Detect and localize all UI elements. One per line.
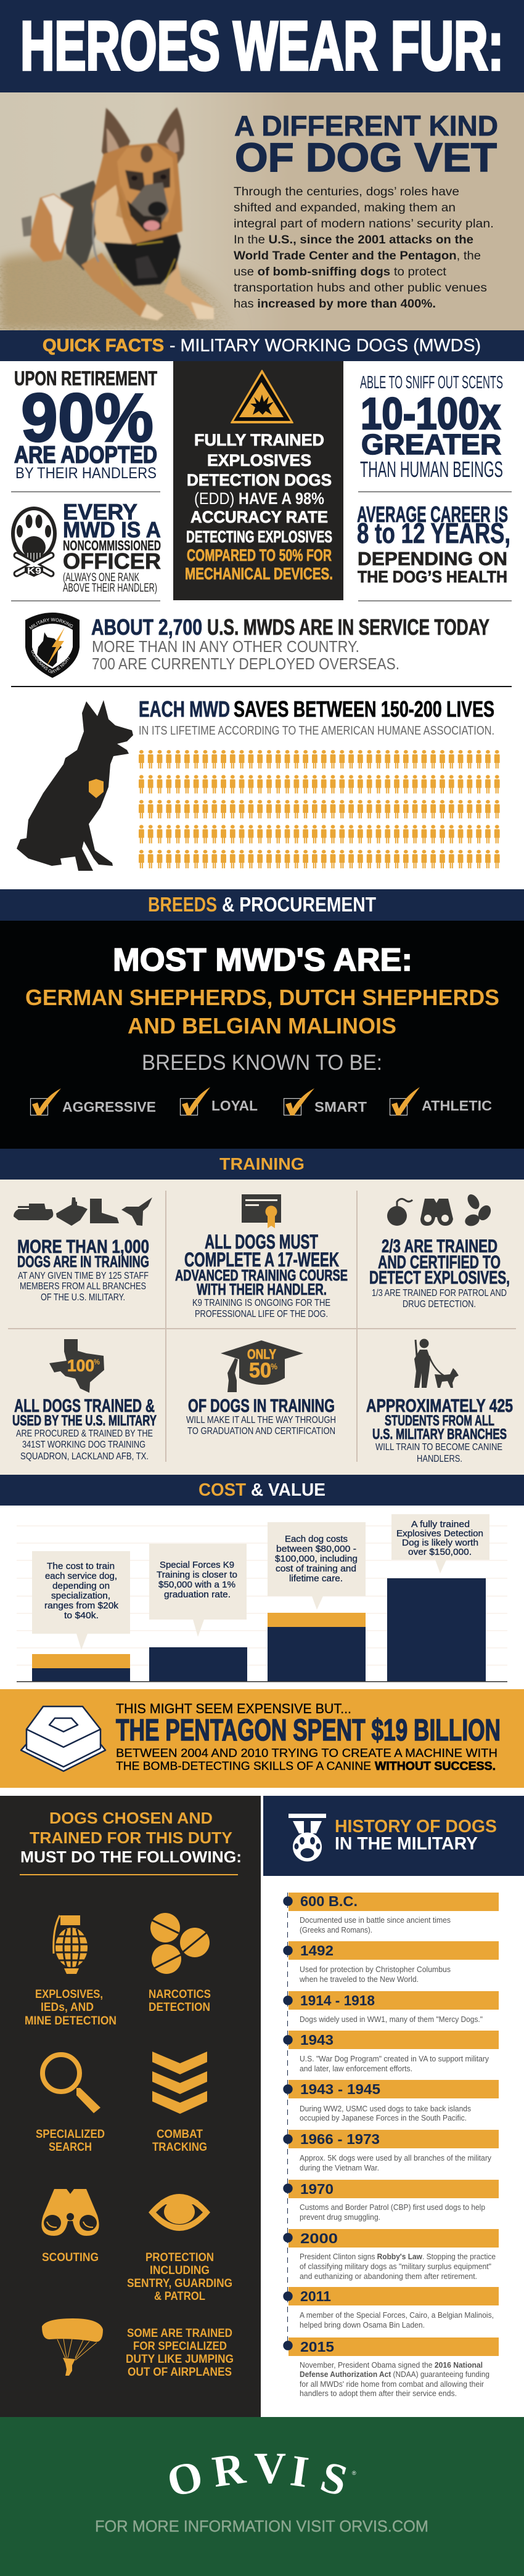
heading: TRAINED FOR THIS DUTY (30, 1828, 232, 1847)
panel: training (0, 1180, 524, 1475)
icon: military working dog shield: GUARDIANS OF THE NIGHT (31, 650, 70, 674)
timeline entry: 1492 (283, 1941, 499, 1984)
icon: medal with paw (289, 1814, 326, 1861)
fact: 2,700 in service: MORE THAN IN ANY OTHER COUNTRY. (92, 637, 359, 656)
fact: 90% adopted: ARE ADOPTED (14, 442, 157, 468)
title banner (0, 0, 524, 92)
text: 17-week course: ADVANCED TRAINING COURSE (175, 1267, 348, 1284)
timeline entry: 1966 - 1973: Approx. 5K dogs were used by all branches of the military (300, 2154, 492, 2162)
fact: noncommissioned officer: OFFICER (63, 548, 161, 574)
timeline entry: 1943 (283, 2031, 499, 2073)
text: half graduate: TO GRADUATION AND CERTIFICATION (187, 1426, 335, 1437)
text: half graduate: WILL MAKE IT ALL THE WAY THROUGH (186, 1415, 336, 1425)
label: specialized duty (126, 2327, 234, 2379)
timeline entry: 600 B.C. (283, 1893, 499, 1934)
text: pentagon spent $19 billion: THE BOMB-DETECTING SKILLS OF A CANINE (116, 1760, 371, 1773)
text: all dogs trained in texas (12, 1396, 157, 1462)
fact: noncommissioned officer: ABOVE THEIR HANDLER) (63, 582, 157, 595)
icon: handler with dog on leash (414, 1339, 459, 1388)
icon: certificate (242, 1194, 281, 1228)
timeline entry: 2011: helped bring down Osama Bin Laden. (300, 2321, 425, 2329)
bar: special forces (149, 1647, 247, 1682)
text: all dogs trained in texas: 341ST WORKING DOG TRAINING (22, 1440, 145, 1450)
logo: orvis (162, 2444, 356, 2507)
callout: cost to train: The cost to train (47, 1561, 115, 1571)
label: combat tracking (152, 2128, 207, 2154)
label: explosives: MINE DETECTION (25, 2015, 117, 2028)
timeline entry: 1492: when he traveled to the New World. (299, 1975, 419, 1984)
callout: special forces: graduation rate. (164, 1589, 231, 1600)
text: 425 students (366, 1396, 513, 1464)
text: all dogs trained in texas: USED BY THE U.S. MILITARY (12, 1412, 157, 1429)
text: 1,000 dogs in training: MEMBERS FROM ALL BRANCHES (20, 1281, 146, 1292)
timeline entry: 2015: handlers to adopt them after their service ends. (300, 2389, 457, 2398)
fact: sense of smell (360, 373, 503, 482)
bar chart: cost and value (17, 1514, 507, 1682)
callout: cost to train: ranges from $20k (44, 1600, 119, 1611)
timeline entry: 2000: of classifying military dogs as "military surplus equipment" (300, 2262, 491, 2271)
text: pentagon spent $19 billion (116, 1701, 501, 1773)
checklist: athletic: ATHLETIC (422, 1098, 492, 1114)
fact: lives saved: EACH MWD (139, 696, 230, 722)
logo: orvis: V (254, 2444, 286, 2493)
heading: MOST MWD'S ARE: (113, 942, 412, 978)
text: certified to detect explosives (369, 1236, 510, 1310)
label: protection: SENTRY, GUARDING (127, 2277, 232, 2290)
intro paragraph: Through the centuries, dogs’ roles have (234, 185, 459, 198)
text: 17-week course (175, 1231, 348, 1319)
section header: breeds and procurement: & PROCUREMENT (222, 893, 376, 916)
fact: sense of smell: GREATER (361, 428, 501, 460)
callout: special forces: Special Forces K9 (160, 1560, 234, 1570)
logo: orvis: I (288, 2445, 311, 2497)
bar: service dog training (32, 1654, 130, 1682)
bar: fully trained value (387, 1578, 486, 1682)
section header: cost and value (0, 1475, 524, 1506)
label: explosives (25, 1988, 117, 2028)
timeline entry: 1914 - 1918 (283, 1991, 499, 2024)
checklist: aggressive (31, 1088, 156, 1115)
text: certified to detect explosives: DRUG DETECTION. (403, 1299, 476, 1310)
callout: cost to train: specialization, (51, 1591, 110, 1601)
text: accuracy rate: EXPLOSIVES (207, 451, 311, 470)
text: accuracy rate: DETECTING EXPLOSIVES (186, 528, 332, 546)
icon: texas 100%: % (94, 1358, 100, 1366)
label: protection: PROTECTION (145, 2251, 214, 2264)
callout: fully trained value: A fully trained (411, 1519, 470, 1530)
callout: each dog costs: between $80,000 - (276, 1544, 356, 1554)
checklist: smart (284, 1088, 367, 1115)
icon: graduation cap 50%: % (271, 1361, 277, 1371)
section header: cost and value: COST (199, 1480, 246, 1500)
heading: MUST DO THE FOLLOWING: (20, 1848, 242, 1866)
photo: german shepherd lying on dry grass (0, 107, 247, 330)
timeline entry: 1943 - 1945: 1943 - 1945 (300, 2081, 380, 2097)
intro paragraph: use of bomb-sniffing dogs to protect (234, 266, 447, 279)
timeline entry: 2000 (283, 2229, 499, 2281)
timeline entry: 1492: Used for protection by Christopher Columbus (300, 1965, 451, 1974)
text: 1,000 dogs in training: OF THE U.S. MILITARY. (41, 1292, 125, 1303)
intro paragraph: has increased by more than 400%. (234, 298, 436, 311)
fact: noncommissioned officer: NONCOMMISSIONED (63, 537, 161, 553)
bar: each dog costs (268, 1613, 366, 1682)
text: 17-week course: COMPLETE A 17-WEEK (184, 1249, 339, 1271)
intro paragraph: integral part of modern nations’ security plan. (234, 218, 494, 230)
timeline entry: 1943 - 1945 (283, 2080, 499, 2122)
icon: pills (150, 1913, 210, 1974)
section header: breeds and procurement: BREEDS (148, 893, 217, 916)
text: half graduate (186, 1396, 336, 1437)
fact: 90% adopted: 90% (21, 380, 154, 456)
callout: fully trained value: Dog is likely worth (402, 1538, 478, 1548)
label: scouting: SCOUTING (42, 2251, 99, 2264)
text: 17-week course: WITH THEIR HANDLER. (197, 1280, 327, 1298)
intro paragraph: shifted and expanded, making them an (234, 202, 456, 214)
timeline entry: 2015: for all MWDs' ride home from combat and allowing their (300, 2380, 484, 2389)
callout: each dog costs (268, 1522, 366, 1610)
heading (335, 1817, 497, 1854)
intro paragraph: transportation hubs and other public venues (234, 282, 487, 295)
fact: noncommissioned officer: (ALWAYS ONE RANK (63, 571, 139, 584)
timeline entry: 1970: prevent drug smuggling. (300, 2213, 380, 2222)
checklist: loyal (180, 1087, 258, 1115)
label: protection (127, 2251, 232, 2303)
pictogram: rows of people saved (139, 750, 500, 868)
text: accuracy rate: DETECTION DOGS (187, 471, 332, 489)
breeds list: AND BELGIAN MALINOIS (128, 1013, 396, 1038)
label: explosives: IEDs, AND (41, 2001, 94, 2014)
timeline entry: 1970: 1970 (300, 2181, 334, 2197)
panel: pentagon callout (0, 1689, 524, 1788)
icon: grenade (54, 1915, 88, 1974)
callout: cost to train: depending on (52, 1581, 110, 1591)
text: 1,000 dogs in training: MORE THAN 1,000 (17, 1236, 149, 1257)
timeline entry: 1966 - 1973: 1966 - 1973 (300, 2131, 380, 2147)
text: pentagon spent $19 billion: BETWEEN 2004 AND 2010 TRYING TO CREATE A MACHINE WITH (116, 1747, 497, 1760)
logo: orvis: S (316, 2452, 353, 2506)
heading: HISTORY OF DOGS (335, 1817, 497, 1836)
timeline entry: 2015: November, President Obama signed the 2016 National (300, 2361, 483, 2370)
label: combat tracking: COMBAT (157, 2128, 203, 2141)
fact: average career: THE DOG’S HEALTH (358, 568, 507, 586)
icon: graduation cap 50%: 50 (249, 1359, 271, 1382)
callout: each dog costs: lifetime care. (289, 1573, 343, 1584)
text: half graduate: OF DOGS IN TRAINING (188, 1396, 335, 1416)
text: 1,000 dogs in training (17, 1236, 149, 1303)
heading: A DIFFERENT KIND (234, 110, 498, 142)
icons: explosive, binoculars and pills (387, 1192, 493, 1228)
icon: graduation cap 50%: ONLY (247, 1347, 276, 1362)
fact: 90% adopted (14, 367, 157, 482)
timeline entry: 1492: 1492 (300, 1942, 334, 1958)
icon: K9 paw and skull badge: K9 (27, 566, 41, 576)
panel: explosives detection dogs (173, 361, 343, 600)
text: accuracy rate: ACCURACY RATE (190, 508, 328, 526)
heading: DOGS CHOSEN AND (49, 1809, 213, 1827)
panel: breeds (0, 921, 524, 1149)
timeline entry: 2015: Defense Authorization Act (NDAA) guaranteeing funding (300, 2370, 489, 2379)
label: specialized duty: SOME ARE TRAINED (127, 2327, 232, 2340)
callout: each dog costs: $100,000, including (275, 1554, 358, 1564)
call to action: FOR MORE INFORMATION VISIT ORVIS.COM (95, 2517, 428, 2535)
label: specialized search (36, 2128, 105, 2154)
icon: texas 100%: 100 (67, 1356, 94, 1375)
icons: tank, ship, boot and jet (14, 1197, 152, 1226)
icon: pentagon building (21, 1706, 105, 1771)
section header: training: TRAINING (219, 1154, 305, 1173)
text: all dogs trained in texas: SQUADRON, LACKLAND AFB, TX. (20, 1451, 149, 1462)
subheading: BREEDS KNOWN TO BE: (142, 1051, 382, 1075)
fact: 90% adopted: UPON RETIREMENT (14, 367, 157, 389)
icon: K9 paw and skull badge (11, 507, 57, 577)
fact: noncommissioned officer: EVERY (63, 499, 137, 524)
text: pentagon spent $19 billion: THIS MIGHT SEEM EXPENSIVE BUT... (116, 1701, 351, 1716)
label: specialized search: SPECIALIZED (36, 2128, 105, 2141)
text: accuracy rate: MECHANICAL DEVICES. (185, 565, 333, 583)
section header: breeds and procurement (0, 889, 524, 921)
text: 1,000 dogs in training: DOGS ARE IN TRAINING (17, 1252, 149, 1271)
icon: dog silhouette with badge (17, 700, 133, 871)
section header: quick facts: QUICK FACTS (43, 336, 164, 356)
text: 17-week course: ALL DOGS MUST (205, 1231, 318, 1253)
section header: cost and value: & VALUE (251, 1480, 325, 1500)
label: protection: INCLUDING (150, 2264, 210, 2277)
intro paragraph: World Trade Center and the Pentagon , the (234, 250, 481, 263)
timeline entry: 2000: and euthanizing or abandoning them after retirement. (300, 2272, 477, 2281)
footer (0, 2417, 524, 2576)
intro paragraph (234, 185, 494, 311)
label: explosives: EXPLOSIVES, (35, 1988, 103, 2001)
callout: special forces: $50,000 with a 1% (158, 1579, 235, 1590)
timeline entry: 600 B.C.: 600 B.C. (300, 1893, 358, 1909)
timeline entry: 600 B.C.: (Greeks and Romans). (300, 1926, 372, 1934)
fact: noncommissioned officer: MWD IS A (63, 517, 161, 542)
callout: cost to train: each service dog, (45, 1571, 117, 1581)
text: accuracy rate: (EDD) HAVE A 98% (194, 489, 324, 508)
callout: fully trained value (391, 1514, 489, 1573)
timeline entry: 2011 (283, 2287, 499, 2329)
breeds list (25, 985, 499, 1038)
checklist: aggressive: AGGRESSIVE (62, 1099, 156, 1115)
callout: special forces: Training is closer to (157, 1570, 237, 1580)
icon: texas 100% (49, 1339, 104, 1393)
text: pentagon spent $19 billion: WITHOUT SUCCESS. (375, 1760, 496, 1773)
timeline: history of dogs in the military (283, 1893, 499, 2398)
icon: graduation cap 50% (221, 1340, 303, 1392)
logo: orvis: R (210, 2444, 248, 2497)
label: specialized duty: DUTY LIKE JUMPING (126, 2353, 234, 2366)
timeline entry: 1943: U.S. "War Dog Program" created in VA to support military (300, 2055, 489, 2063)
heading: OF DOG VET (235, 134, 497, 180)
text: accuracy rate: COMPARED TO 50% FOR (187, 546, 332, 565)
label: specialized duty: OUT OF AIRPLANES (128, 2366, 232, 2379)
callout: special forces (149, 1544, 247, 1637)
icon: eye (149, 2194, 210, 2231)
callout: each dog costs: cost of training and (276, 1563, 356, 1574)
label: specialized duty: FOR SPECIALIZED (133, 2340, 227, 2353)
timeline entry: 600 B.C.: Documented use in battle since ancient times (300, 1916, 451, 1925)
text: 17-week course: K9 TRAINING IS ONGOING FOR THE (192, 1298, 330, 1308)
fact: average career (357, 502, 510, 586)
timeline entry: 1970: Customs and Border Patrol (CBP) first used dogs to help (300, 2203, 485, 2212)
label: combat tracking: TRACKING (152, 2141, 207, 2154)
label: narcotics: NARCOTICS (149, 1988, 211, 2001)
breeds list: GERMAN SHEPHERDS, DUTCH SHEPHERDS (25, 985, 499, 1010)
section header: training (0, 1149, 524, 1180)
icon: magnifying glass (43, 2055, 100, 2113)
fact: average career: DEPENDING ON (358, 548, 507, 569)
fact: noncommissioned officer (63, 499, 161, 595)
panel: history header (263, 1796, 524, 1876)
label: narcotics (149, 1988, 211, 2014)
fact: 2,700 in service (91, 614, 489, 673)
label: protection: & PATROL (154, 2290, 205, 2303)
text: all dogs trained in texas: ALL DOGS TRAINED & (14, 1396, 155, 1416)
fact: 2,700 in service: ABOUT 2,700 (91, 614, 202, 640)
intro paragraph: In the U.S., since the 2001 attacks on the (234, 234, 473, 247)
timeline entry: 1970 (283, 2180, 499, 2222)
checklist: athletic (390, 1087, 492, 1115)
text: accuracy rate (185, 431, 333, 583)
icon: binoculars (41, 2189, 99, 2236)
icon: chevrons (152, 2052, 207, 2114)
callout: each dog costs: Each dog costs (285, 1534, 348, 1544)
checklist: smart: SMART (314, 1099, 367, 1115)
checklist: loyal: LOYAL (211, 1098, 258, 1114)
timeline entry: 1966 - 1973: during the Vietnam War. (300, 2164, 379, 2172)
timeline entry: 2011: 2011 (300, 2288, 331, 2304)
timeline entry: 2011: A member of the Special Forces, Cairo, a Belgian Malinois, (300, 2311, 494, 2320)
timeline entry: 1943: 1943 (300, 2032, 334, 2048)
label: narcotics: DETECTION (149, 2001, 210, 2014)
text: all dogs trained in texas: ARE PROCURED & TRAINED BY THE (16, 1429, 153, 1439)
section header: quick facts (0, 330, 524, 361)
timeline entry: 1966 - 1973 (283, 2130, 499, 2172)
panel: duties (0, 1796, 261, 2417)
timeline entry: 2015: 2015 (300, 2339, 334, 2355)
fact: sense of smell: 10-100x (361, 389, 501, 439)
timeline entry: 1943 - 1945: occupied by Japanese Forces in the South Pacific. (300, 2114, 467, 2122)
timeline entry: 1914 - 1918: Dogs widely used in WW1, many of them "Mercy Dogs." (300, 2015, 483, 2024)
text: 17-week course: PROFESSIONAL LIFE OF THE DOG. (195, 1309, 328, 1319)
heading (20, 1809, 242, 1866)
callout: cost to train (32, 1551, 130, 1650)
icon: military working dog shield (25, 613, 80, 678)
text: 1,000 dogs in training: AT ANY GIVEN TIME BY 125 STAFF (18, 1271, 149, 1281)
icon: parachutist (42, 2318, 103, 2376)
heading: IN THE MILITARY (335, 1834, 478, 1854)
fact: 90% adopted: BY THEIR HANDLERS (15, 465, 157, 482)
timeline entry: 1914 - 1918: 1914 - 1918 (300, 1992, 375, 2008)
timeline entry: 1943 - 1945: During WW2, USMC used dogs to take back islands (300, 2105, 471, 2113)
callout: fully trained value: over $150,000. (408, 1547, 472, 1557)
text: accuracy rate: FULLY TRAINED (194, 431, 324, 449)
icon: military working dog shield: MILITARY WORKING DOG (30, 618, 73, 630)
timeline entry: 2015 (283, 2338, 499, 2398)
panel: intro hero (0, 92, 524, 330)
icon: explosive warning triangle (231, 370, 293, 423)
text: 425 students: HANDLERS. (417, 1454, 462, 1464)
logo: orvis: O (162, 2450, 208, 2507)
timeline entry: 2000: President Clinton signs Robby's Law. Stopping the practice (300, 2252, 496, 2261)
section header: quick facts: - MILITARY WORKING DOGS (MWDS) (170, 336, 481, 356)
fact: 2,700 in service: 700 ARE CURRENTLY DEPLOYED OVERSEAS. (92, 654, 399, 673)
label: specialized search: SEARCH (49, 2141, 92, 2154)
fact: lives saved (139, 696, 494, 738)
callout: fully trained value: Explosives Detection (396, 1528, 483, 1539)
timeline entry: 2000: 2000 (300, 2230, 338, 2246)
logo: orvis: ® (352, 2470, 356, 2476)
heading (234, 110, 498, 180)
timeline entry: 1943: and later, law enforcement efforts. (300, 2064, 412, 2073)
callout: cost to train: to $40k. (64, 1610, 99, 1621)
